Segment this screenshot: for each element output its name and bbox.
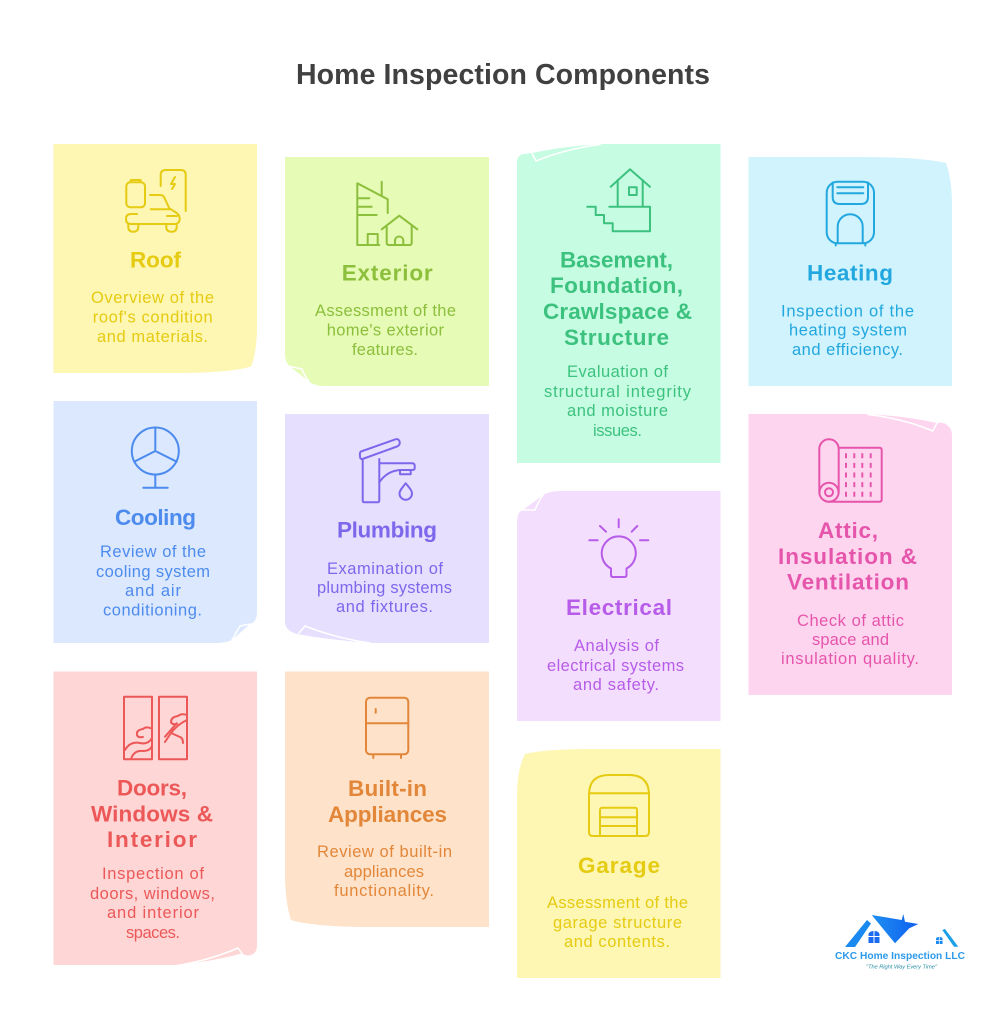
description (781, 612, 919, 668)
description: functionality. (334, 882, 434, 900)
description: space and (812, 631, 889, 649)
description: Assessment of the (315, 302, 456, 320)
description: insulation quality. (781, 650, 919, 668)
panel: heating (748, 157, 952, 386)
panel: doors, windows and interior (54, 672, 257, 965)
title: Home Inspection Components (296, 59, 710, 91)
icon: insulation roll (819, 439, 882, 502)
page fold (868, 414, 937, 431)
heading: Garage (578, 853, 660, 878)
icon: battery, car and charger (126, 170, 186, 232)
panel: attic, insulation and ventilation (748, 414, 952, 695)
heading: Plumbing (337, 518, 437, 543)
heading: Built-in (348, 776, 427, 801)
heading: Windows & (91, 802, 213, 827)
description: electrical systems (547, 657, 684, 675)
icon: light bulb (589, 519, 648, 577)
heading: Ventilation (787, 570, 909, 594)
description: Review of the (100, 543, 206, 561)
description: Check of attic (797, 612, 904, 630)
description (781, 302, 914, 359)
page fold (532, 144, 600, 161)
panel: built-in appliances (285, 672, 489, 927)
icon: tower and house (357, 182, 417, 245)
page fold (180, 948, 243, 965)
description (90, 865, 215, 942)
heating card background (748, 157, 952, 386)
attic card background (748, 414, 952, 695)
panel: cooling (54, 401, 257, 643)
electrical card background (517, 491, 720, 721)
heading: Doors, (117, 776, 187, 801)
page fold (299, 626, 370, 643)
description: and safety. (573, 676, 659, 694)
description: home's exterior (327, 322, 444, 340)
description (547, 894, 688, 951)
panel: garage (517, 749, 720, 978)
doors card background (54, 672, 257, 965)
description (544, 363, 692, 440)
heading (543, 248, 692, 350)
description: structural integrity (544, 383, 692, 401)
heading: Crawlspace & (543, 299, 692, 324)
heading (91, 776, 213, 852)
icon: garage (589, 775, 649, 836)
icon: faucet and drop (360, 439, 415, 502)
description: cooling system (96, 563, 210, 581)
logo: CKC Home Inspection LLC (835, 914, 966, 970)
description: features. (352, 341, 418, 359)
description: heating system (789, 322, 907, 340)
heading: Electrical (566, 595, 672, 620)
description: Review of built-in (317, 843, 452, 861)
exterior card background (285, 157, 489, 386)
page fold (232, 624, 250, 640)
heading (778, 518, 917, 594)
description: and fixtures. (336, 598, 433, 616)
description: and interior (107, 904, 200, 922)
description: Examination of (327, 560, 443, 578)
heading: Exterior (342, 261, 433, 286)
panel: electrical (517, 491, 720, 721)
heading: Interior (107, 827, 197, 852)
logo tagline: "The Right Way Every Time" (866, 964, 938, 970)
description: roof's condition (93, 308, 213, 326)
icon: house on stepped foundation (587, 169, 650, 231)
description: and air (125, 582, 182, 600)
description: doors, windows, (90, 885, 215, 903)
description (91, 289, 214, 346)
description: Inspection of the (781, 302, 914, 320)
description (547, 637, 684, 694)
heading: Appliances (328, 802, 447, 827)
icon: windows with trees (124, 697, 187, 759)
heading: Basement, (560, 248, 673, 273)
description: Assessment of the (547, 894, 688, 912)
panel: plumbing (285, 414, 489, 643)
description: Inspection of (102, 865, 204, 883)
page fold (290, 366, 309, 382)
description (315, 302, 456, 359)
description (317, 843, 452, 900)
panel: exterior (285, 157, 489, 386)
cooling card background (54, 401, 257, 643)
panel: basement, foundation, crawlspace and structure (517, 144, 720, 463)
description: and moisture (567, 402, 668, 420)
roof card background (54, 144, 257, 373)
heading: Roof (130, 248, 182, 272)
panel: roof (54, 144, 257, 373)
description: and contents. (564, 933, 670, 951)
icon: heating unit (827, 182, 874, 246)
description: Analysis of (574, 637, 659, 655)
icon: fan (132, 428, 179, 488)
heading: Heating (807, 261, 893, 286)
description: and efficiency. (792, 341, 903, 359)
description: issues. (593, 422, 642, 440)
heading: Attic, (818, 518, 878, 543)
heading (328, 776, 447, 827)
heading: Foundation, (550, 273, 683, 298)
description: conditioning. (103, 602, 202, 620)
description: Evaluation of (567, 363, 668, 381)
basement card background (517, 144, 720, 463)
description (317, 560, 452, 616)
icon: refrigerator (366, 698, 408, 758)
description: Overview of the (91, 289, 214, 307)
description (96, 543, 210, 620)
description: appliances (344, 863, 424, 881)
heading: Cooling (115, 505, 196, 530)
plumbing card background (285, 414, 489, 643)
heading: Structure (564, 325, 669, 350)
heading: Insulation & (778, 544, 917, 569)
description: spaces. (126, 924, 180, 942)
appliances card background (285, 672, 489, 927)
description: garage structure (553, 914, 682, 932)
garage card background (517, 749, 720, 978)
logo roof mark (845, 914, 958, 947)
description: and materials. (97, 328, 208, 346)
description: plumbing systems (317, 579, 452, 597)
page fold (523, 495, 543, 510)
logo name: CKC Home Inspection LLC (835, 951, 966, 962)
